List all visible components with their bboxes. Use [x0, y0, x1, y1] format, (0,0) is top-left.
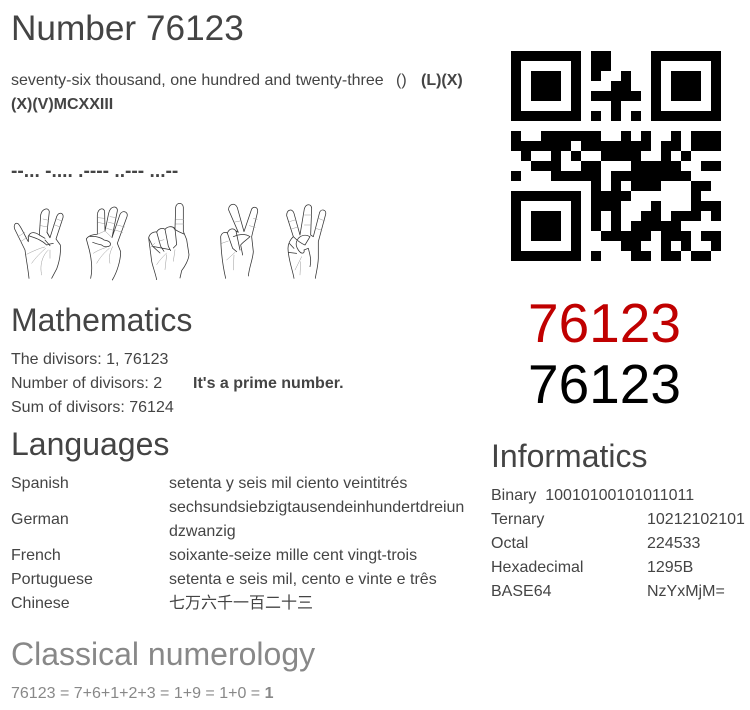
table: languages: Portuguese: [11, 571, 93, 588]
table: informatics: 224533: [647, 535, 700, 552]
text block: divisors: The divisors: 1, 76123: [11, 351, 168, 368]
number in red: 76123: [528, 292, 681, 354]
icon: QR code: [511, 51, 721, 261]
table: informatics: Octal: [491, 535, 528, 552]
table: languages: French: [11, 547, 61, 564]
title: Number 76123: [11, 9, 244, 48]
icon: hand 1: [149, 203, 189, 280]
table: languages: setenta e seis mil, cento e vinte e três: [169, 571, 437, 588]
number in black: 76123: [528, 353, 681, 415]
text block: divisors: It's a prime number.: [193, 375, 344, 392]
table: languages: 七万六千一百二十三: [169, 595, 313, 612]
table: languages: soixante-seize mille cent vingt-trois: [169, 547, 417, 564]
text block: divisors: Sum of divisors: 76124: [11, 399, 174, 416]
heading: languages: Languages: [11, 426, 169, 462]
table: languages: Spanish: [11, 475, 69, 492]
icon: hand 2: [221, 204, 258, 278]
icon: sign language hands: [14, 203, 326, 280]
morse code: --... -.... .---- ..--- ...--: [11, 161, 178, 182]
table: informatics: Ternary: [491, 511, 544, 528]
icon: hand 7: [14, 209, 63, 278]
number name and roman numeral: (): [396, 72, 407, 89]
number name and roman numeral: [11, 72, 463, 113]
number name and roman numeral: seventy-six thousand, one hundred and twenty-three: [11, 72, 384, 89]
table: languages: German: [11, 511, 69, 528]
table: informatics: 10212102101: [647, 511, 745, 528]
table: informatics: NzYxMjM=: [647, 583, 725, 600]
heading: informatics: Informatics: [491, 438, 647, 474]
heading: classical numerology: Classical numerology: [11, 636, 315, 672]
table: languages: setenta y seis mil ciento veintitrés: [169, 475, 407, 492]
icon: hand 3: [287, 205, 326, 278]
table: languages: sechsundsiebzigtausendeinhundertdreiun: [169, 499, 464, 516]
text block: divisors: [11, 351, 344, 416]
number name and roman numeral: (L)(X): [421, 72, 463, 89]
table: informatics: BASE64: [491, 583, 551, 600]
table: languages: [11, 475, 464, 612]
table: informatics: 1295B: [647, 559, 693, 576]
text block: divisors: Number of divisors: 2: [11, 375, 162, 392]
icon: hand 6: [86, 207, 127, 280]
heading: mathematics: Mathematics: [11, 302, 192, 338]
table: informatics: Binary 10010100101011011: [491, 487, 694, 504]
table: informatics: [491, 487, 745, 600]
table: languages: dzwanzig: [169, 523, 236, 540]
number name and roman numeral: (X)(V)MCXXIII: [11, 96, 113, 113]
table: languages: Chinese: [11, 595, 70, 612]
text block: numerology sum: 76123 = 7+6+1+2+3 = 1+9 = 1+0 = 1: [11, 685, 273, 702]
table: informatics: Hexadecimal: [491, 559, 583, 576]
